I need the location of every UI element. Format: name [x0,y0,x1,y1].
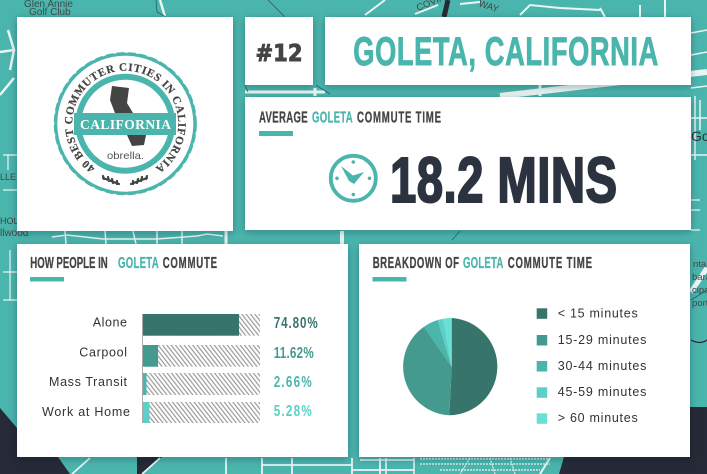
text: badge ring title: 40 BEST COMMUTER CITIES IN CALIFORNIA [64,63,186,172]
map background: Golf Club [29,7,71,18]
legend: 30-44 minutes [558,359,646,373]
map background: LLE [0,172,16,182]
panel: average commute time [245,97,691,230]
icon: badge band [74,113,176,135]
heading: breakdown: BREAKDOWN OF [373,254,459,272]
panel: badge [12,14,237,238]
panel: rank [245,17,313,85]
icon: clock [331,156,376,201]
heading: average commute: COMMUTE TIME [357,108,441,126]
pie chart [403,318,497,415]
map background: llwood [0,228,28,239]
legend: > 60 minutes [558,411,638,425]
bar chart: Mass Transit [49,375,128,389]
bar chart [42,314,318,423]
bar chart: Carpool [79,346,127,360]
heading: breakdown: COMMUTE TIME [508,254,592,272]
text: band label: CALIFORNIA [80,117,171,132]
heading: how people commute: HOW PEOPLE IN [30,254,108,272]
bar chart: Work at Home [42,405,130,419]
bar chart: 11.62% [274,344,314,361]
bar chart: 5.28% [274,402,312,419]
bar chart: 74.80% [274,314,318,331]
icon: badge inner ring [78,77,172,171]
heading: how people commute: GOLETA [118,254,159,272]
heading: average commute [259,108,441,126]
heading: how people commute [30,254,217,272]
heading: breakdown: GOLETA [463,254,503,272]
panel: how people commute [17,244,348,457]
heading: average commute: AVERAGE [259,108,308,126]
map background: HOL [0,216,19,226]
heading: breakdown [373,254,592,272]
legend: 15-29 minutes [558,333,646,347]
icon: California state [110,86,146,146]
bar chart: Alone [93,316,127,330]
heading: how people commute: COMMUTE [163,254,217,272]
map background: nta [693,259,707,270]
text: commute time value: 18.2 MINS [390,144,617,216]
heading: average commute: GOLETA [312,108,353,126]
text: brand: obrella. [107,150,144,162]
icon: badge scalloped ring [54,53,196,194]
text: rank number: #12 [256,41,302,67]
legend: 45-59 minutes [558,385,646,399]
legend [537,307,646,425]
title: GOLETA, CALIFORNIA [353,30,658,74]
panel: breakdown of commute time [359,244,690,457]
bar chart: 2.66% [274,373,312,390]
icon: laurels [103,176,147,184]
legend: < 15 minutes [558,307,638,321]
panel: title [325,17,691,85]
